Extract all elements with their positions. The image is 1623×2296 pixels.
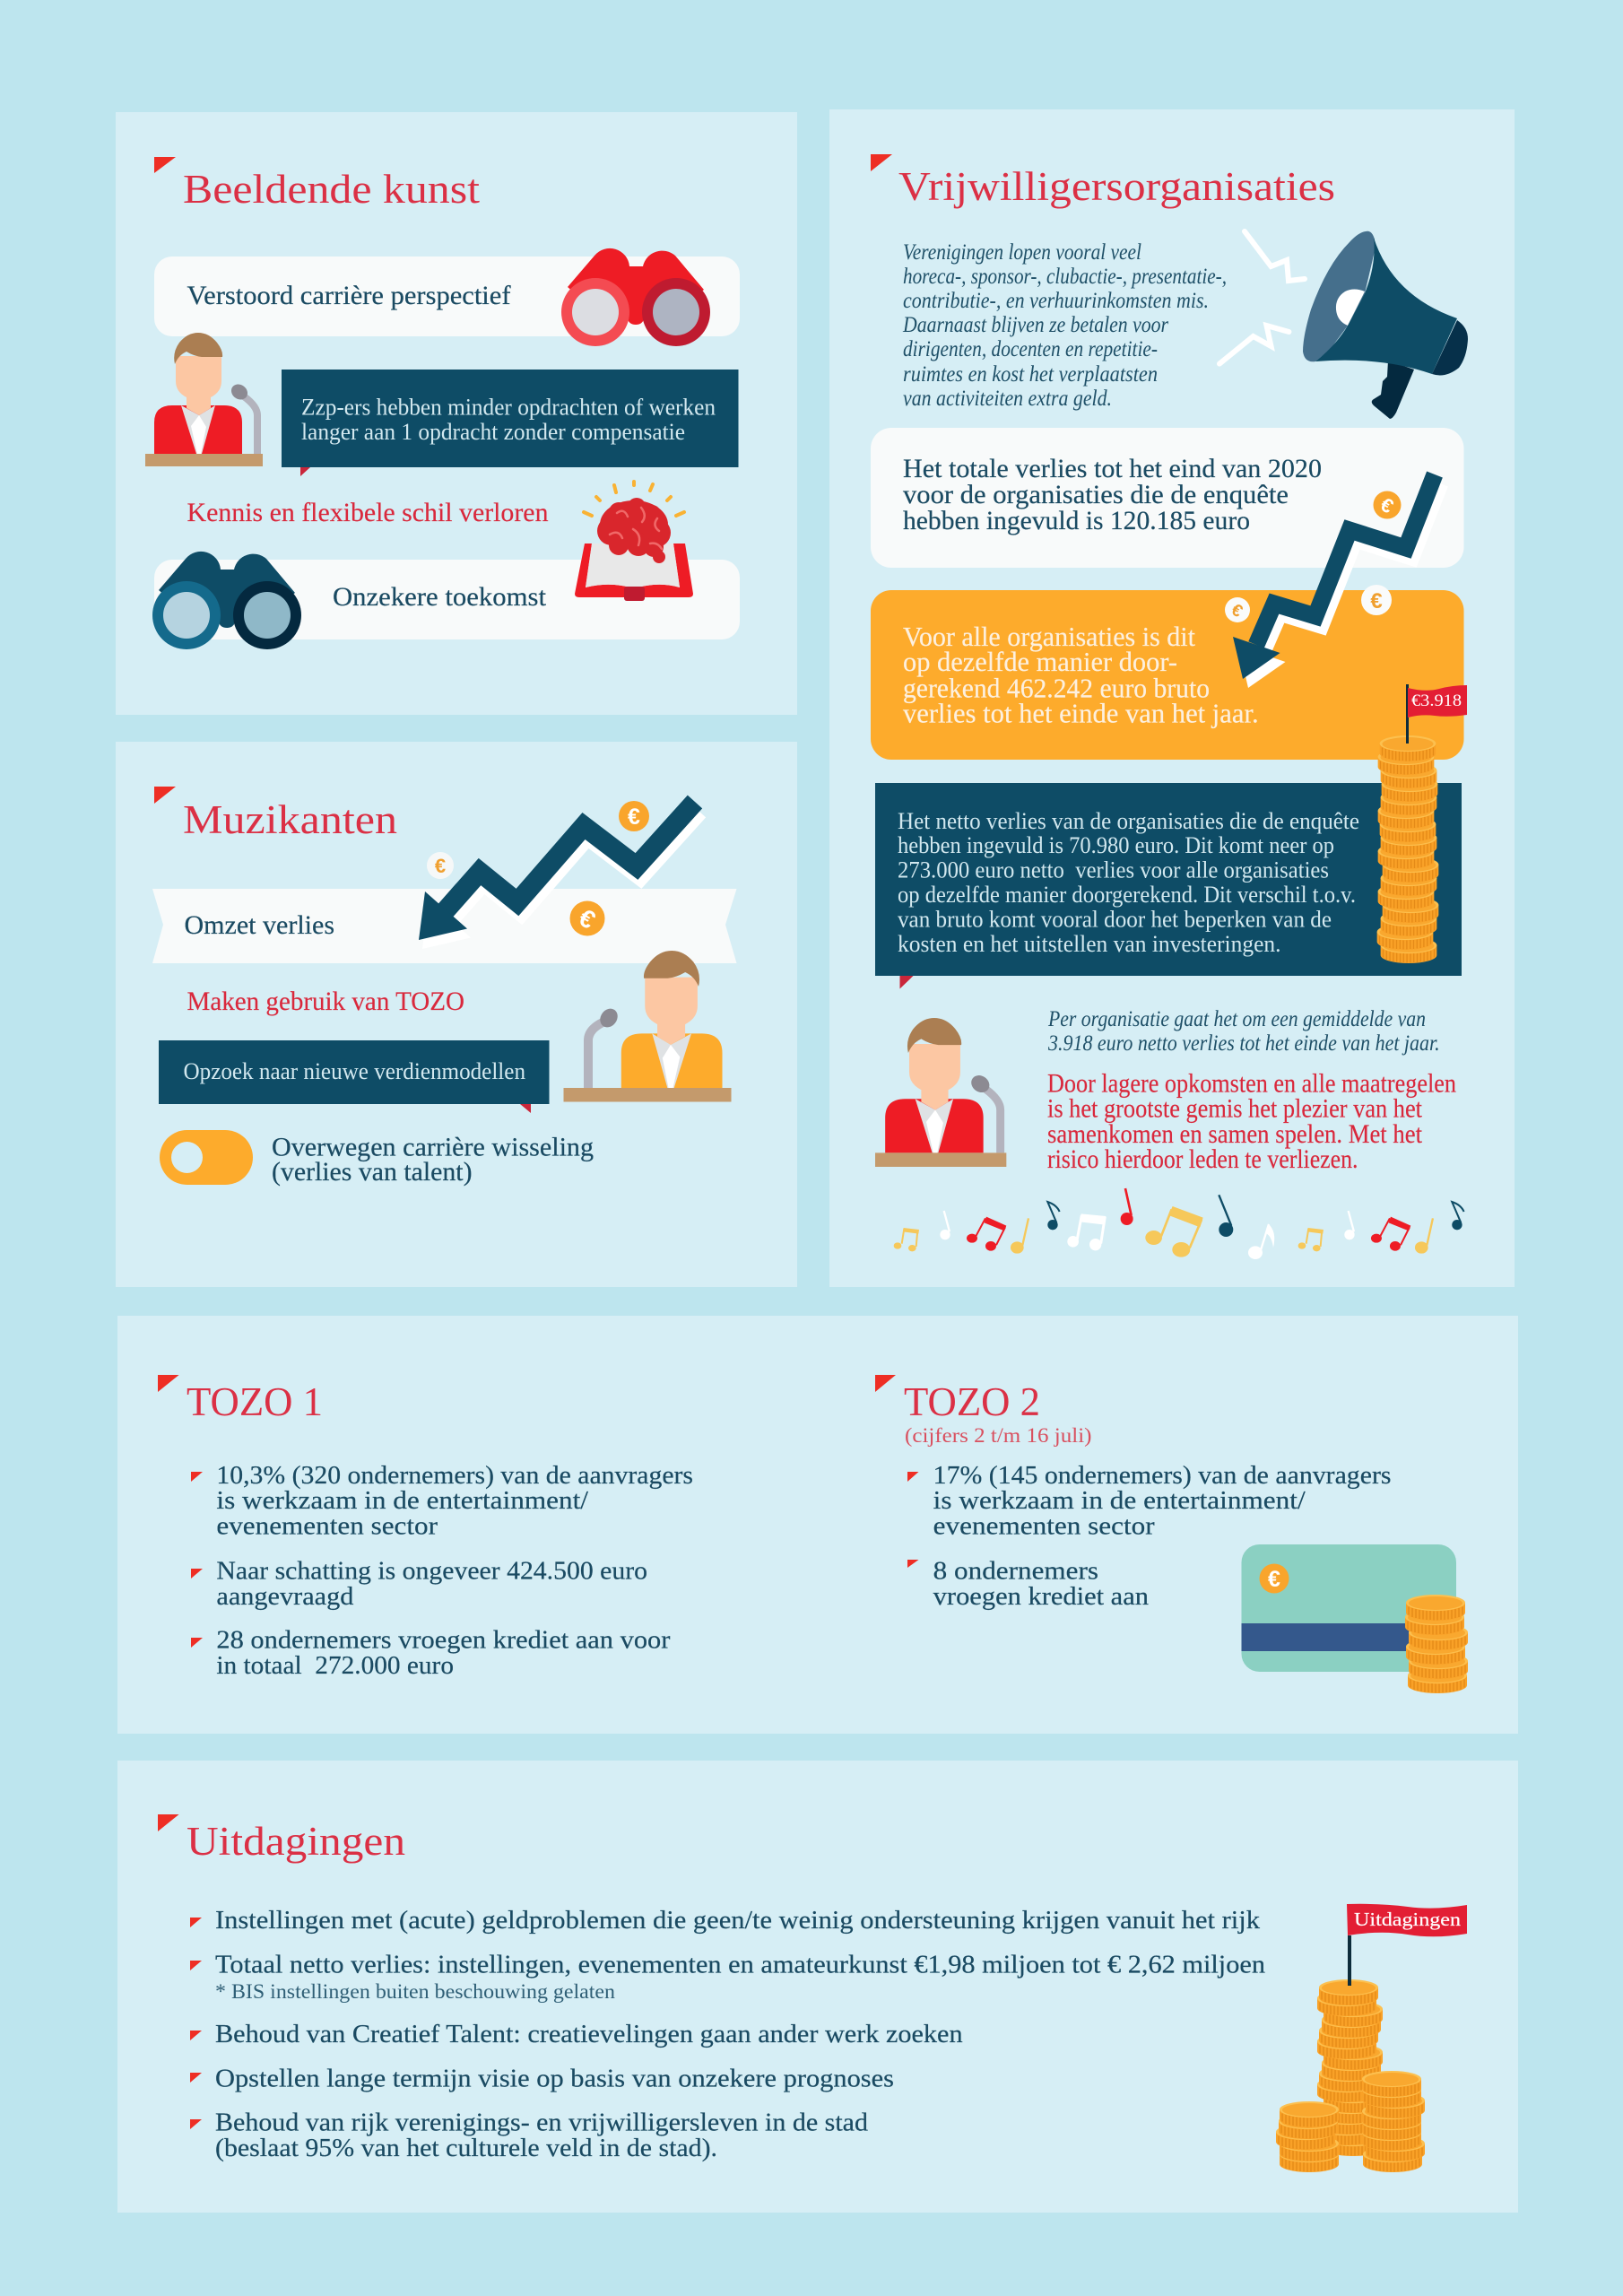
list: TOZO 1: aangevraagd [216, 1582, 354, 1611]
list: TOZO 1: 10,3% (320 ondernemers) van de aanvragers [216, 1461, 693, 1490]
text: intro italics: horeca-, sponsor-, clubactie-, presentatie-, [903, 265, 1227, 289]
list: TOZO 2: evenementen sector [933, 1512, 1155, 1541]
icon: blue binoculars [152, 552, 301, 649]
list: Uitdagingen: Behoud van rijk verenigings- en vrijwilligersleven in de stad [215, 2109, 869, 2137]
list: Uitdagingen: Totaal netto verlies: instellingen, evenementen en amateurkunst €1,98 miljoen tot € 2,62 miljoen [215, 1951, 1266, 1979]
subheading: cijfers: (cijfers 2 t/m 16 juli) [905, 1424, 1092, 1447]
text: per organisatie: Per organisatie gaat het om een gemiddelde van [1047, 1007, 1426, 1031]
heading: TOZO 2: TOZO 2 [904, 1379, 1040, 1424]
text: red statement: is het grootste gemis het plezier van het [1047, 1094, 1423, 1124]
icon: toggle [160, 1130, 253, 1185]
dark box: netto verlies: van bruto komt vooral door het beperken van de [898, 907, 1332, 933]
heading marker [154, 157, 176, 173]
callout: Opzoek naar nieuwe verdienmodellen: Opzoek naar nieuwe verdienmodellen [183, 1058, 525, 1084]
text: red statement: Door lagere opkomsten en alle maatregelen [1047, 1069, 1456, 1098]
text: Kennis en flexibele schil verloren: Kennis en flexibele schil verloren [187, 498, 549, 527]
heading marker [158, 1814, 179, 1831]
TOZO 1 marker [158, 1375, 179, 1392]
list: Uitdagingen: (beslaat 95% van het culturele veld in de stad). [215, 2134, 717, 2162]
list: TOZO 1: is werkzaam in de entertainment/ [216, 1486, 589, 1515]
icon: euro coins around arrow: € [1376, 493, 1397, 517]
dark box: netto verlies: kosten en het uitstellen van investeringen. [898, 931, 1280, 957]
list: TOZO 2: vroegen krediet aan [933, 1582, 1150, 1611]
white box: totale verlies: Het totale verlies tot het eind van 2020 [903, 454, 1322, 483]
callout: Zzp-ers: langer aan 1 opdracht zonder compensatie [301, 419, 685, 445]
icon: coin stack with flag: €3.918 [1411, 691, 1462, 710]
text: per organisatie: 3.918 euro netto verlies tot het einde van het jaar. [1047, 1031, 1440, 1056]
icon: euro coins around arrow [1225, 491, 1401, 622]
text: Overwegen carrière wisseling: Overwegen carrière wisseling [272, 1132, 594, 1162]
text: intro italics [902, 240, 1227, 411]
panel: Muzikanten [116, 742, 797, 1287]
icon: speaker at lectern [875, 1018, 1006, 1167]
list: TOZO 1 [191, 1461, 693, 1680]
list: TOZO 2: is werkzaam in de entertainment/ [933, 1486, 1306, 1515]
orange box: alle organisaties: op dezelfde manier door- [903, 646, 1177, 677]
icon: music notes [894, 1188, 1464, 1259]
heading: Uitdagingen: Uitdagingen [187, 1819, 405, 1864]
white box: totale verlies: hebben ingevuld is 120.185 euro [903, 506, 1250, 535]
orange box: alle organisaties: gerekend 462.242 euro bruto [903, 673, 1210, 703]
text: red statement [1047, 1069, 1456, 1174]
list: TOZO 1: 28 ondernemers vroegen krediet aan voor [216, 1626, 671, 1655]
icon: credit card with coins [1241, 1544, 1468, 1693]
heading marker [871, 154, 892, 171]
list: TOZO 1: in totaal 272.000 euro [216, 1651, 454, 1680]
icon: euro coin orange: € [628, 804, 640, 830]
panel: Uitdagingen [117, 1761, 1518, 2213]
list: Uitdagingen: * BIS instellingen buiten beschouwing gelaten [215, 1980, 616, 2003]
icon: book with brain [575, 482, 693, 601]
list: Uitdagingen: Opstellen lange termijn visie op basis van onzekere prognoses [215, 2065, 894, 2093]
TOZO 2 marker [875, 1375, 896, 1392]
white pill: Onzekere toekomst [154, 560, 740, 639]
icon: speaker orange [563, 951, 732, 1101]
list: Uitdagingen: Instellingen met (acute) geldproblemen die geen/te weinig ondersteuning krijgen vanuit het rijk [215, 1906, 1261, 1935]
white box: totale verlies [871, 428, 1463, 568]
dark box: netto verlies: 273.000 euro netto verlies voor alle organisaties [898, 857, 1329, 883]
orange box: alle organisaties: verlies tot het einde van het jaar. [903, 698, 1259, 728]
panel: Beeldende kunst [116, 112, 797, 715]
icon: coin stack with flag [1377, 684, 1467, 963]
heading marker [154, 787, 176, 804]
text: Maken gebruik van TOZO: Maken gebruik van TOZO [187, 987, 464, 1016]
panel: Vrijwilligersorganisaties [829, 109, 1515, 1287]
icon: megaphone [1303, 231, 1468, 419]
icon: credit card with coins: € [1268, 1567, 1280, 1592]
arrow: declining line [419, 802, 699, 949]
text: intro italics: ruimtes en kost het verplaatsten [903, 362, 1158, 387]
white pill: Onzekere toekomst: Onzekere toekomst [333, 582, 547, 612]
list: TOZO 2: 8 ondernemers [933, 1557, 1098, 1586]
icon: euro coin orange tilted: € [574, 903, 601, 935]
callout: Zzp-ers: Zzp-ers hebben minder opdrachten of werken [301, 395, 716, 420]
icon: euro coin orange [619, 801, 649, 831]
icon: red binoculars [561, 248, 710, 346]
text: red statement: samenkomen en samen spelen. Met het [1047, 1119, 1423, 1149]
text: Overwegen carrière wisseling: (verlies van talent) [272, 1157, 472, 1187]
callout: Zzp-ers [282, 370, 739, 476]
icon: euro coin white: € [435, 855, 446, 877]
list: Uitdagingen [190, 1906, 1266, 2162]
heading: TOZO 1: TOZO 1 [187, 1379, 323, 1424]
white pill: Verstoord carrière perspectief: Verstoord carrière perspectief [187, 281, 511, 310]
icon: coin stacks with flag: Uitdagingen [1354, 1909, 1462, 1930]
white box: totale verlies: voor de organisaties die de enquête [903, 480, 1289, 509]
text: intro italics: Daarnaast blijven ze betalen voor [902, 313, 1168, 337]
text: red statement: risico hierdoor leden te verliezen. [1047, 1144, 1358, 1174]
heading: Vrijwilligersorganisaties: Vrijwilligersorganisaties [898, 164, 1335, 209]
orange box: alle organisaties: Voor alle organisaties is dit [903, 621, 1195, 652]
dark box: netto verlies: hebben ingevuld is 70.980 euro. Dit komt neer op [898, 832, 1334, 858]
arrow: declining line [1233, 474, 1440, 688]
heading: Beeldende kunst: Beeldende kunst [183, 167, 481, 212]
icon: coin stacks with flag [1276, 1904, 1467, 2172]
text: per organisatie [1047, 1007, 1440, 1056]
icon: sound bolts [1219, 231, 1305, 364]
icon: euro coins around arrow: € [1228, 601, 1245, 622]
list: TOZO 1: Naar schatting is ongeveer 424.500 euro [216, 1557, 647, 1586]
list: Uitdagingen: Behoud van Creatief Talent: creatievelingen gaan ander werk zoeken [215, 2020, 963, 2048]
dark box: netto verlies [875, 783, 1462, 988]
icon: euro coins around arrow: € [1370, 589, 1383, 613]
icon: euro coin orange tilted [570, 900, 604, 936]
text: intro italics: Verenigingen lopen vooral veel [903, 240, 1141, 265]
white pill: Verstoord carrière perspectief [154, 257, 740, 336]
list: TOZO 2 [907, 1461, 1391, 1611]
text: intro italics: contributie-, en verhuurinkomsten mis. [903, 289, 1209, 313]
text: intro italics: van activiteiten extra geld. [903, 387, 1112, 411]
ribbon: Omzet verlies: Omzet verlies [185, 910, 334, 940]
dark box: netto verlies: op dezelfde manier doorgerekend. Dit verschil t.o.v. [898, 882, 1356, 908]
text: Overwegen carrière wisseling [272, 1132, 594, 1187]
text: intro italics: dirigenten, docenten en repetitie- [903, 337, 1158, 361]
icon: euro coin white [427, 852, 454, 879]
list: TOZO 2: 17% (145 ondernemers) van de aanvragers [933, 1461, 1391, 1490]
ribbon: Omzet verlies [152, 889, 737, 963]
list: TOZO 1: evenementen sector [216, 1512, 438, 1541]
panel: TOZO [117, 1316, 1518, 1734]
dark box: netto verlies: Het netto verlies van de organisaties die de enquête [898, 808, 1359, 834]
heading: Muzikanten: Muzikanten [183, 797, 397, 842]
callout: Opzoek naar nieuwe verdienmodellen [159, 1040, 549, 1113]
orange box: alle organisaties [871, 590, 1463, 760]
icon: speaker at lectern [145, 333, 263, 466]
